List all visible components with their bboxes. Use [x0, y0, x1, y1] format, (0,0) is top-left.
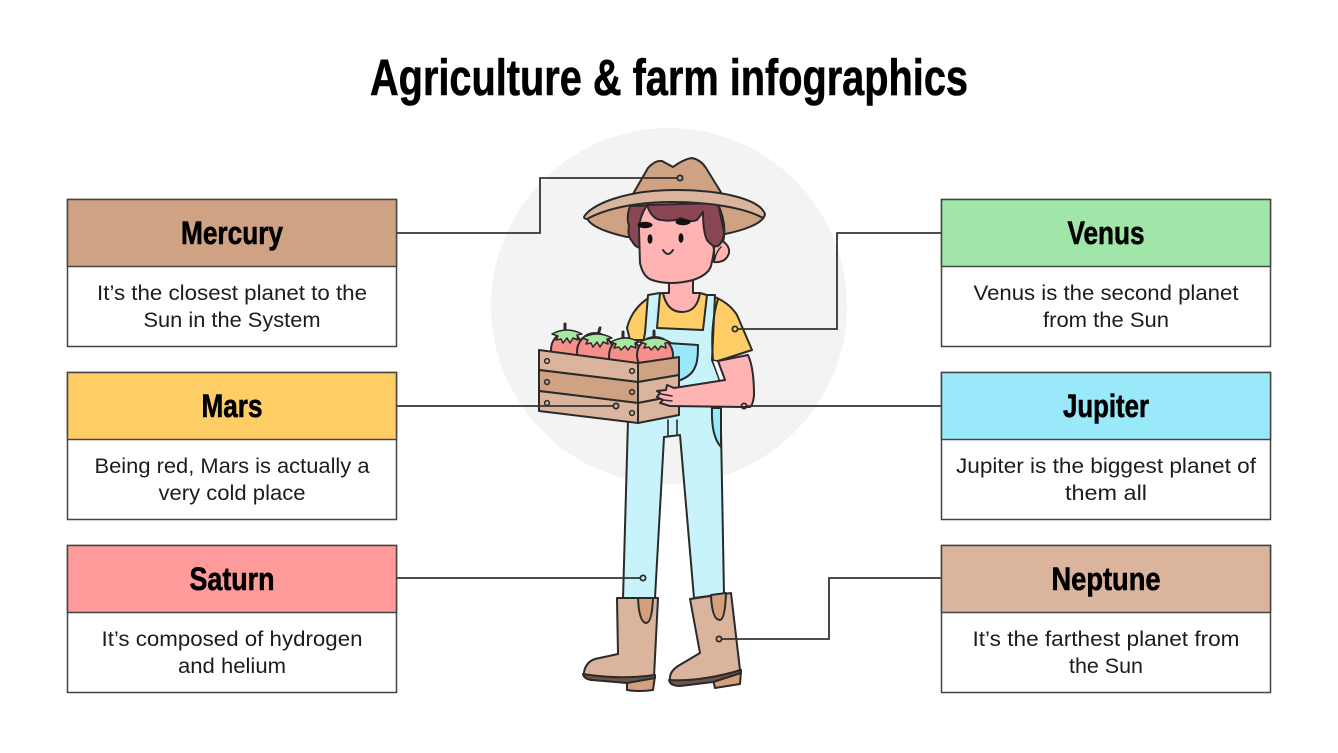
panel: Jupiter: Jupiter is the biggest planet of — [956, 454, 1256, 478]
panel: Mars: Being red, Mars is actually a — [94, 454, 370, 478]
connector: Mercury — [397, 175, 683, 233]
panel: Venus: Venus — [1068, 215, 1144, 251]
panel: Neptune: Neptune — [1052, 561, 1160, 597]
panel: Saturn: It’s composed of hydrogen — [102, 627, 362, 651]
connector: Jupiter — [741, 403, 941, 409]
strawberry 2 — [577, 328, 613, 371]
panel: Jupiter: them all — [1065, 481, 1147, 505]
panel: Neptune: It’s the farthest planet from — [972, 627, 1240, 651]
connector: Neptune — [716, 578, 941, 642]
left boot — [583, 598, 658, 691]
arm and hand — [657, 355, 754, 407]
connector: Mars — [397, 403, 619, 409]
neck — [663, 278, 700, 312]
ear — [714, 242, 729, 262]
face — [639, 205, 714, 283]
panel: Neptune: the Sun — [1069, 654, 1143, 678]
title: Agriculture & farm infographics — [370, 49, 968, 106]
side pocket — [712, 408, 721, 447]
panel: Mercury: It’s the closest planet to the — [97, 281, 367, 305]
smile — [663, 250, 673, 254]
shirt — [627, 293, 752, 361]
eyebrows — [638, 222, 652, 228]
bib pocket — [652, 342, 698, 381]
panel: Mercury — [68, 200, 396, 346]
eyes — [648, 234, 652, 244]
panel: Saturn — [68, 546, 396, 692]
panel: Venus: Venus is the second planet — [974, 281, 1239, 305]
panel: Venus: from the Sun — [1043, 308, 1169, 332]
panel: Neptune — [942, 546, 1270, 692]
strawberry 3 — [609, 332, 641, 374]
panel: Jupiter: Jupiter — [1063, 388, 1149, 424]
hat crown — [633, 158, 722, 194]
sleeve seam — [712, 299, 718, 360]
panel: Venus — [942, 200, 1270, 346]
white strap gap — [712, 360, 725, 382]
connector: Venus — [732, 233, 941, 332]
crate — [539, 350, 679, 423]
crotch detail — [668, 420, 677, 436]
hat brim band — [584, 190, 765, 219]
panel: Jupiter — [942, 372, 1270, 520]
connector lines — [397, 175, 941, 642]
panel: Saturn: and helium — [178, 654, 286, 678]
panel: Mars — [68, 372, 396, 520]
right boot — [669, 593, 741, 688]
panel: Mercury: Sun in the System — [144, 308, 320, 332]
panel: Mercury: Mercury — [181, 215, 283, 251]
hat brim underside — [587, 196, 764, 237]
overalls — [623, 293, 724, 599]
connector: Saturn — [397, 575, 646, 581]
panel: Mars: Mars — [202, 388, 262, 424]
strawberry 4 — [637, 331, 673, 373]
hair fringe — [647, 203, 724, 246]
panel: Saturn: Saturn — [190, 561, 274, 597]
strawberry 1 — [551, 324, 583, 368]
background circle — [491, 128, 847, 484]
panel: Mars: very cold place — [158, 481, 306, 505]
hair back — [628, 204, 724, 248]
farmer illustration — [539, 158, 765, 691]
